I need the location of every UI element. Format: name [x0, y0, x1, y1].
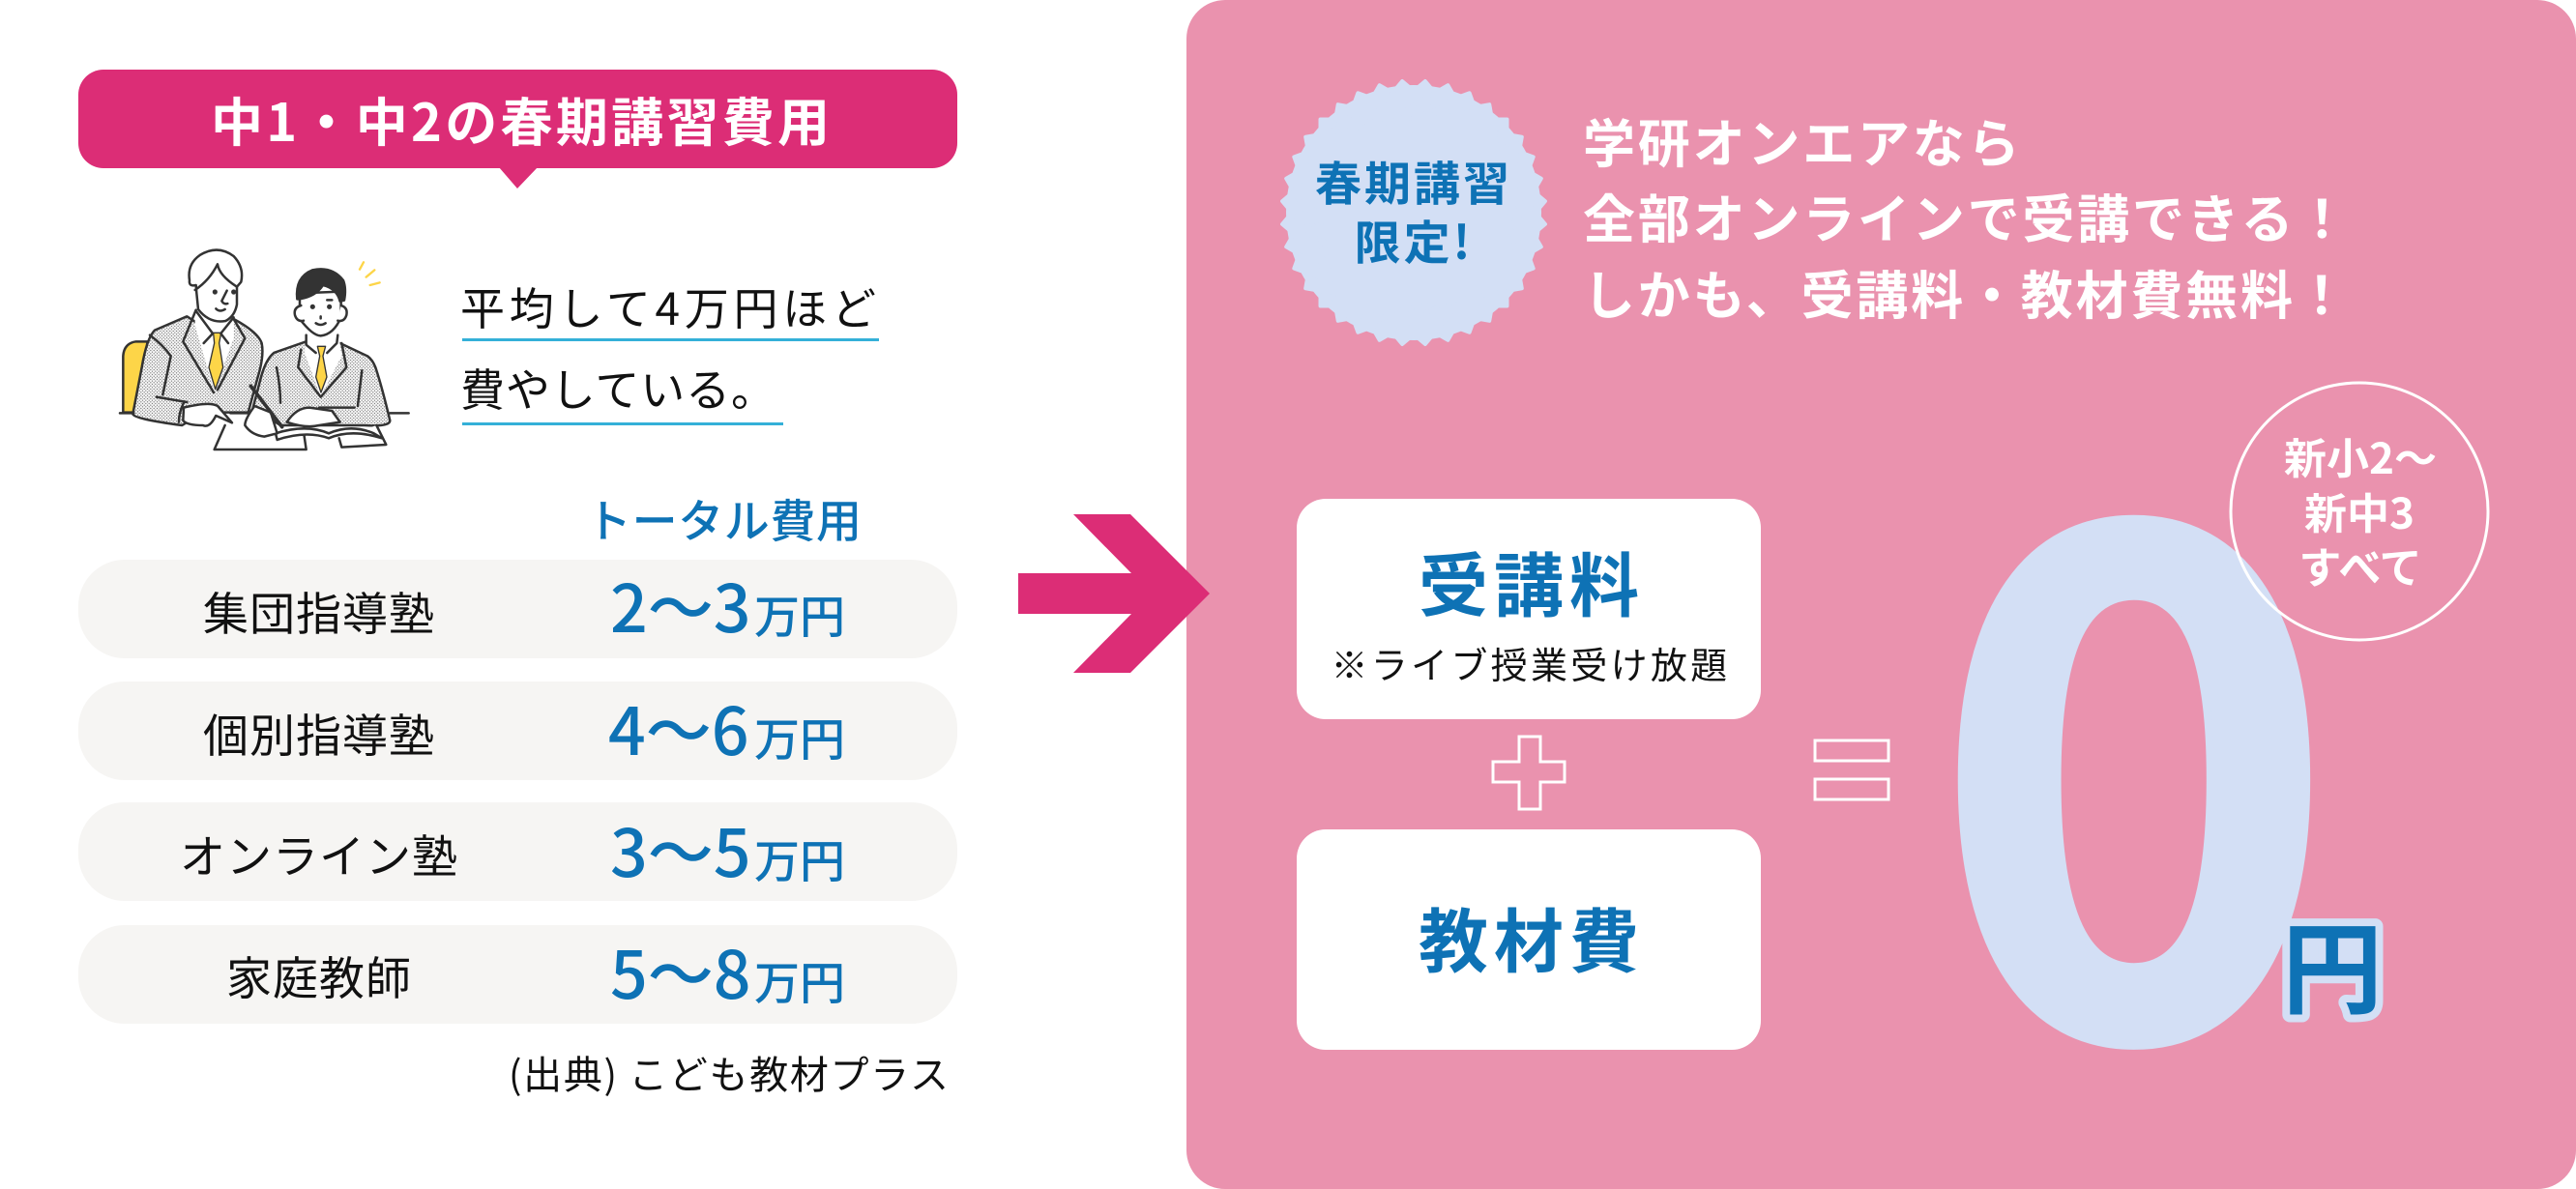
card: tuition: [1297, 499, 1761, 719]
yen mark: 円: [2282, 888, 2383, 1034]
row: individual cram school: 個別指導塾: [203, 699, 435, 766]
callout circle: all grades: 新小2〜: [2284, 424, 2437, 486]
badge: spring course only: 限定!: [1355, 205, 1473, 273]
row: individual cram school: [78, 679, 957, 780]
callout circle: all grades: 新中3: [2304, 479, 2415, 541]
heading: everything online and free: 全部オンラインで受講できる！: [1583, 177, 2351, 253]
heading: everything online and free: しかも、受講料・教材費無料！: [1583, 253, 2351, 330]
badge: spring course only: 春期講習: [1315, 146, 1512, 214]
row: group cram school: 2〜3: [610, 556, 751, 652]
row: online cram school: 万円: [754, 825, 845, 891]
arrow: [1018, 514, 1210, 673]
row: online cram school: オンライン塾: [180, 820, 458, 886]
row: private tutor: [78, 922, 957, 1024]
card: materials: [1297, 829, 1761, 1050]
row: online cram school: [78, 800, 957, 901]
row: online cram school: 3〜5: [610, 800, 751, 896]
panel: spring course free: [1186, 0, 2576, 1189]
callout circle: all grades: [2231, 383, 2488, 640]
heading banner: spring course cost: [78, 70, 957, 188]
callout circle: all grades: すべて: [2298, 534, 2422, 595]
card: tuition: ※ライブ授業受け放題: [1331, 636, 1731, 689]
heading banner: spring course cost: 中1・中2の春期講習費用: [211, 80, 830, 157]
column heading: total cost: トータル費用: [586, 484, 862, 551]
icon: plus: [1493, 737, 1565, 809]
text: average about 40,000 yen: 費やしている。: [460, 356, 776, 420]
row: group cram school: [78, 556, 957, 658]
row: private tutor: 万円: [754, 946, 845, 1013]
row: private tutor: 家庭教師: [226, 942, 412, 1008]
row: individual cram school: 万円: [754, 703, 845, 769]
text: average about 40,000 yen: [460, 275, 879, 425]
row: private tutor: 5〜8: [610, 922, 751, 1018]
text: average about 40,000 yen: 平均して4万円ほど: [460, 275, 876, 338]
icon: equals: [1815, 740, 1888, 799]
row: group cram school: 万円: [754, 580, 845, 647]
row: individual cram school: 4〜6: [608, 679, 749, 774]
icon: two men in suits studying: [120, 250, 409, 450]
badge: spring course only: [1282, 81, 1545, 344]
heading: everything online and free: [1583, 102, 2351, 330]
source note: (出典) こども教材プラス: [509, 1044, 949, 1100]
card: materials: 教材費: [1419, 885, 1645, 987]
heading: everything online and free: 学研オンエアなら: [1583, 102, 2022, 178]
row: group cram school: 集団指導塾: [203, 577, 435, 644]
card: tuition: 受講料: [1419, 530, 1645, 631]
